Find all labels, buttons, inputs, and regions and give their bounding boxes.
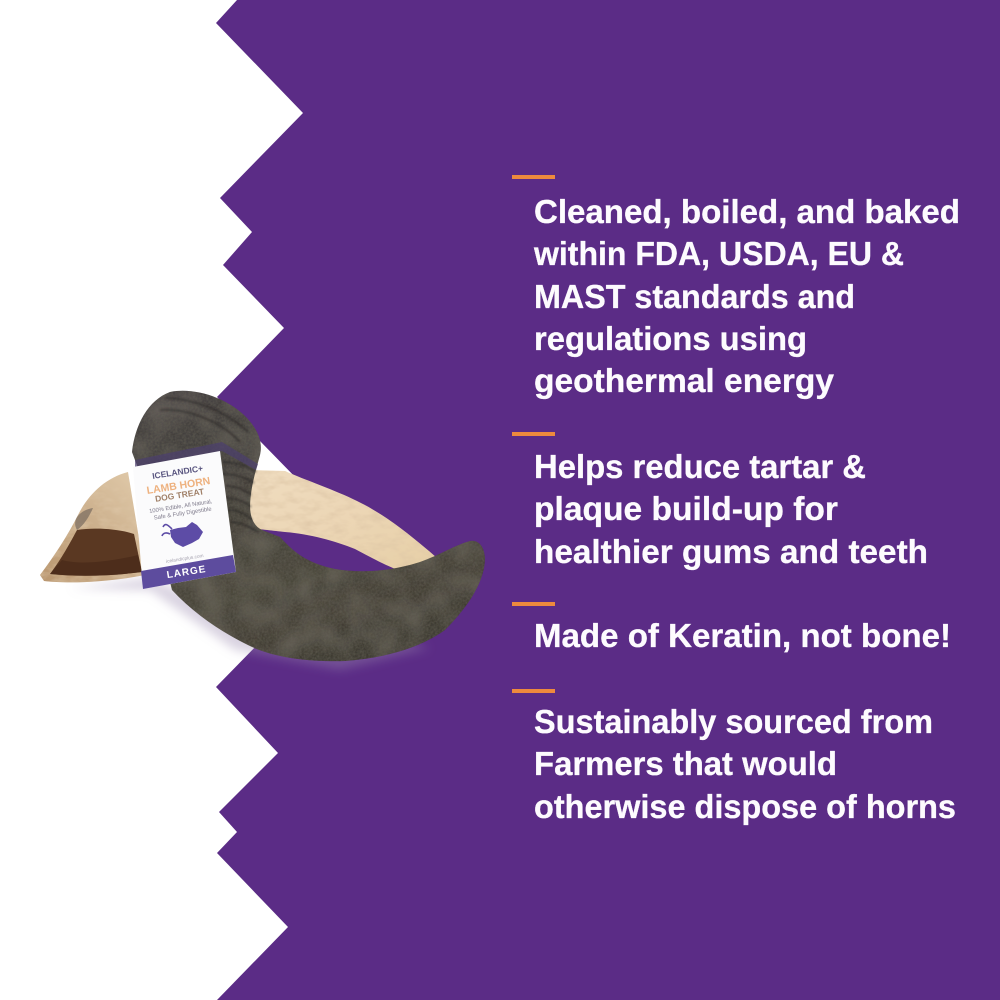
orange dash xyxy=(512,602,555,606)
text block: processing standards: Cleaned, boiled, and baked xyxy=(534,193,960,230)
text block: processing standards: within FDA, USDA, EU & xyxy=(533,235,904,272)
text block: dental benefit: Helps reduce tartar & xyxy=(534,448,866,485)
text block: dental benefit xyxy=(512,432,928,570)
left horn tip with open cavity xyxy=(40,472,145,582)
tag card xyxy=(133,451,236,589)
text block: sustainability: otherwise dispose of horns xyxy=(534,788,956,825)
horn ridges xyxy=(160,398,258,532)
dark horn xyxy=(132,391,485,661)
size label: LARGE xyxy=(166,564,207,581)
product tag xyxy=(133,451,236,589)
text block: dental benefit: healthier gums and teeth xyxy=(534,533,928,570)
right light horn shaft xyxy=(250,470,437,570)
text block: processing standards: MAST standards and xyxy=(534,278,855,315)
text block: sustainability xyxy=(512,689,956,825)
text block: dental benefit: plaque build-up for xyxy=(534,490,838,527)
text block: keratin xyxy=(512,602,951,654)
icon: Iceland map with ram horns xyxy=(162,522,203,547)
tag strap xyxy=(135,442,258,470)
text block: sustainability: Farmers that would xyxy=(534,745,837,782)
tag bottom band xyxy=(141,555,236,589)
text block: processing standards: geothermal energy xyxy=(534,362,835,399)
text block: processing standards: regulations using xyxy=(534,320,807,357)
tag claims: 100% Edible, All Natural, xyxy=(149,499,213,515)
text block: sustainability: Sustainably sourced from xyxy=(534,703,933,740)
orange dash xyxy=(512,689,555,693)
text block: processing standards xyxy=(512,175,960,399)
orange dash xyxy=(512,175,555,179)
brand name: ICELANDIC+ xyxy=(151,463,204,481)
product photo: lamb horn with tag xyxy=(40,391,485,670)
orange dash xyxy=(512,432,555,436)
text block: keratin: Made of Keratin, not bone! xyxy=(534,617,951,654)
purple zigzag background panel xyxy=(216,0,1000,1000)
soft shadow under horn xyxy=(70,578,430,670)
product type: DOG TREAT xyxy=(154,486,206,504)
product name: LAMB HORN xyxy=(146,475,211,497)
product tag: Safe & Fully Digestible xyxy=(154,506,212,522)
website: icelandicplus.com xyxy=(166,553,204,565)
